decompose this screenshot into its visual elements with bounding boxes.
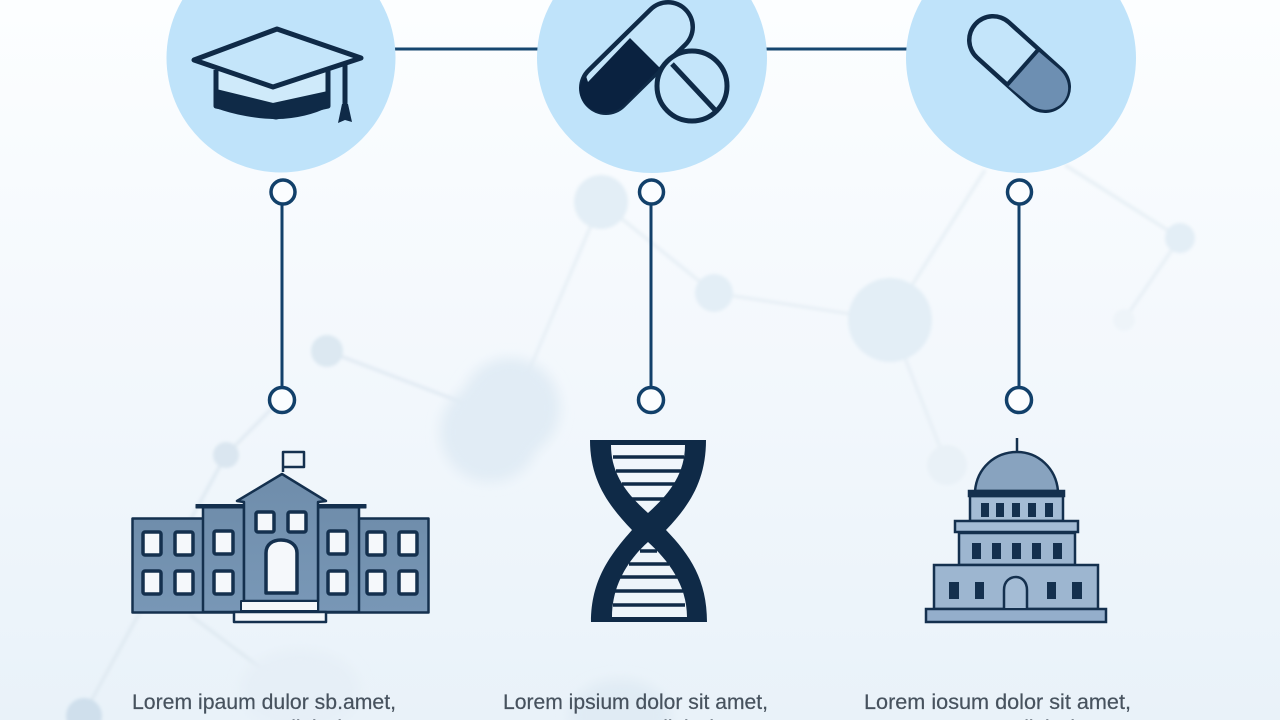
caption column 3: Lorem iosum dolor sit amet, [864, 691, 1131, 714]
icon: DNA helix [590, 440, 707, 622]
icon circle: graduation cap [166, 0, 396, 172]
horizontal connector: cap to capsule [394, 48, 538, 50]
caption column 1: Lorem ipaum dulor sb.amet, [132, 691, 396, 714]
icon circle: capsule and tablet [537, 0, 767, 173]
icon: domed capitol building [926, 438, 1106, 622]
caption column 2: Lorem ipsium dolor sit amet, [503, 691, 768, 714]
icon: university building [132, 452, 428, 622]
connector column 3 [1006, 180, 1032, 412]
connector column 2 [638, 180, 664, 412]
icon: capsule and tablet [580, 27, 727, 121]
horizontal connector: capsule to pill [766, 48, 907, 50]
connector column 1 [270, 180, 295, 412]
molecular network background [66, 165, 1195, 720]
icon: capsule [993, 40, 1068, 110]
icon circle: capsule [906, 0, 1136, 173]
icon: graduation cap [194, 29, 361, 123]
